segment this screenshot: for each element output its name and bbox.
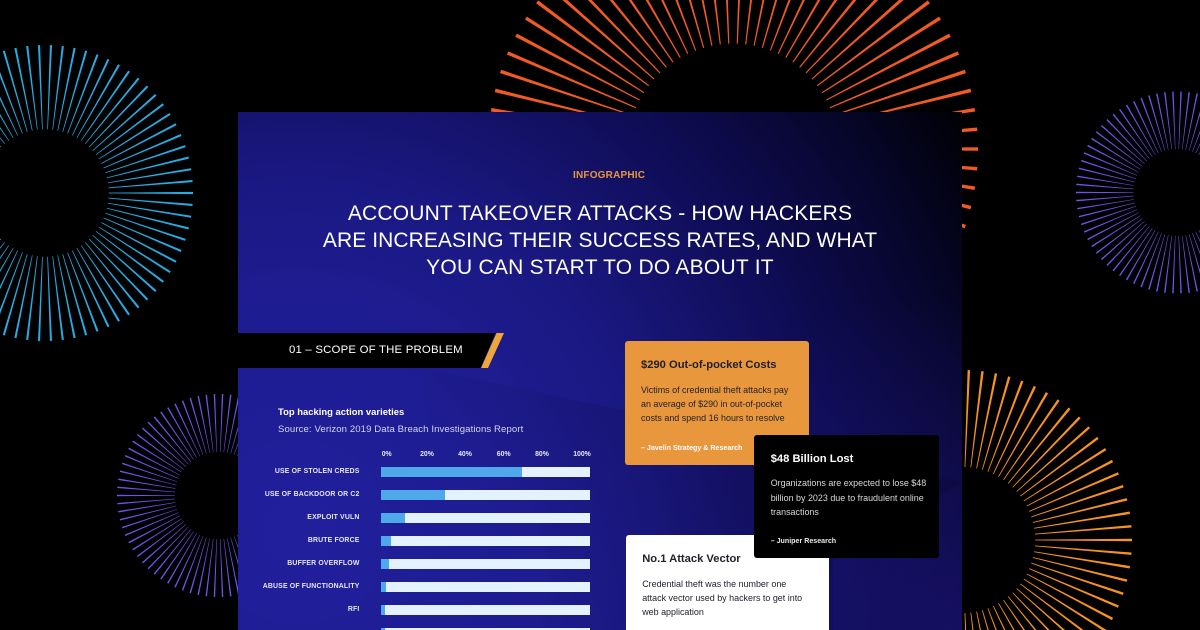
chart heading: Source: Verizon 2019 Data Breach Investigations Report xyxy=(278,424,523,434)
bar chart xyxy=(263,451,591,630)
bar chart: EXPLOIT VULN xyxy=(307,514,360,521)
panel: infographic background xyxy=(238,112,962,630)
card: $290 out-of-pocket costs: – Javelin Strategy & Research xyxy=(641,444,742,452)
burst: orange xyxy=(435,0,1031,462)
card: no.1 attack vector: attack vector used by hackers to get into xyxy=(642,593,802,603)
bar chart: USE OF BACKDOOR OR C2 xyxy=(265,491,360,498)
card: $48 billion lost: – Juniper Research xyxy=(771,537,836,545)
card: $48 billion lost: Organizations are expected to lose $48 xyxy=(771,478,926,488)
bar chart: BUFFER OVERFLOW xyxy=(287,560,360,567)
card: no.1 attack vector: Credential theft was the number one xyxy=(642,579,786,589)
card: $48 billion lost: billion by 2023 due to fraudulent online xyxy=(771,493,924,503)
axis ticks xyxy=(382,451,591,458)
burst: purple left xyxy=(95,366,342,625)
axis ticks: 60% xyxy=(497,451,511,458)
title: YOU CAN START TO DO ABOUT IT xyxy=(426,256,774,278)
card: no.1 attack vector: web application xyxy=(642,607,704,617)
chart heading: Top hacking action varieties xyxy=(278,407,404,418)
title xyxy=(322,202,877,278)
axis ticks: 20% xyxy=(420,451,434,458)
axis ticks: 40% xyxy=(458,451,472,458)
card: $48 billion lost: $48 Billion Lost xyxy=(771,453,853,465)
card: $48 billion lost xyxy=(754,435,939,558)
card: $48 billion lost: transactions xyxy=(771,507,819,517)
burst: purple right xyxy=(1054,63,1200,322)
bar chart: ABUSE OF FUNCTIONALITY xyxy=(263,583,360,590)
card: $290 out-of-pocket costs: an average of $290 in out-of-pocket xyxy=(641,399,782,409)
bar chart: RFI xyxy=(348,606,360,613)
section banner: 01 – SCOPE OF THE PROBLEM xyxy=(289,344,463,356)
title: ACCOUNT TAKEOVER ATTACKS - HOW HACKERS xyxy=(348,202,852,224)
card: $290 out-of-pocket costs xyxy=(625,341,809,465)
card: no.1 attack vector: No.1 Attack Vector xyxy=(642,553,741,565)
card: $290 out-of-pocket costs: costs and spend 16 hours to resolve xyxy=(641,413,785,423)
axis ticks: 100% xyxy=(573,451,591,458)
bar chart: USE OF STOLEN CREDS xyxy=(275,468,360,475)
bar chart: BRUTE FORCE xyxy=(308,537,360,544)
chart heading xyxy=(278,407,524,434)
card: no.1 attack vector xyxy=(626,535,829,630)
section banner xyxy=(238,333,504,368)
burst: blue xyxy=(0,4,225,382)
axis ticks: 80% xyxy=(535,451,549,458)
eyebrow label: INFOGRAPHIC xyxy=(573,170,645,181)
burst: amber xyxy=(755,322,1169,630)
axis ticks: 0% xyxy=(382,451,392,458)
card: $290 out-of-pocket costs: Victims of credential theft attacks pay xyxy=(641,385,788,395)
title: ARE INCREASING THEIR SUCCESS RATES, AND WHAT xyxy=(323,228,877,252)
card: $290 out-of-pocket costs: $290 Out-of-pocket Costs xyxy=(641,359,777,371)
